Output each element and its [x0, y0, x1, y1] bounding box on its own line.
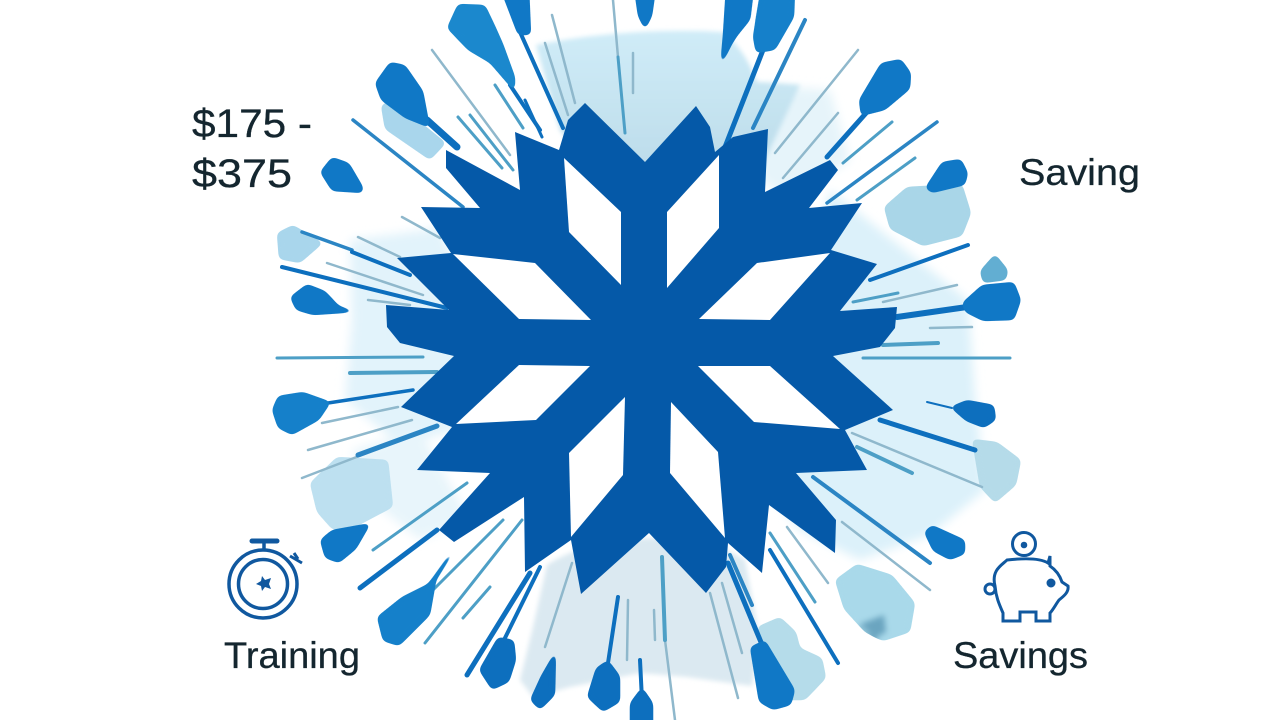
label: savings: Savings: [953, 635, 1088, 676]
icon: piggy bank with coin: [985, 532, 1068, 621]
teardrop splashes: [272, 0, 1021, 720]
drop: lower left: [272, 392, 331, 435]
drop: left: [290, 284, 358, 315]
drop: bottom right isolated: [924, 525, 965, 560]
label: saving: Saving: [1019, 152, 1140, 193]
drop: bottom left large: [377, 545, 459, 646]
central snowflake: [386, 103, 897, 594]
label: price range: $175 -: [192, 102, 312, 146]
snowflake cut-outs: [453, 155, 840, 538]
drop: upper right: [859, 59, 911, 116]
drop: top right small: [720, 0, 754, 68]
pale colour blobs: [277, 100, 1021, 700]
drop: small blob right: [962, 282, 1021, 321]
drop: lower right isolated: [950, 400, 996, 428]
drop: top: [500, 0, 531, 35]
drop: bottom small: [530, 650, 556, 710]
drop: bottom: [479, 637, 516, 690]
label: price range: [192, 102, 312, 196]
drop: bottom left isolated: [320, 523, 371, 563]
drop: bottom right: [750, 640, 795, 710]
drop: top left large: [447, 4, 515, 92]
drop: mid left isolated: [320, 157, 363, 193]
label: training: Training: [224, 635, 360, 676]
icon: stopwatch: [229, 541, 302, 618]
drop: bottom centre: [587, 660, 620, 712]
drop: top centre: [634, 0, 656, 30]
drop: mid right isolated: [925, 159, 968, 193]
drop: bottom centre edge: [630, 687, 653, 720]
label: price range: $375: [192, 152, 292, 196]
drop: top left outer: [375, 62, 430, 128]
drop: top right: [753, 0, 795, 53]
snowflake body: [386, 103, 897, 594]
pale watercolor wash behind snowflake: [345, 31, 985, 697]
thin radiating lines: [277, 0, 1010, 720]
